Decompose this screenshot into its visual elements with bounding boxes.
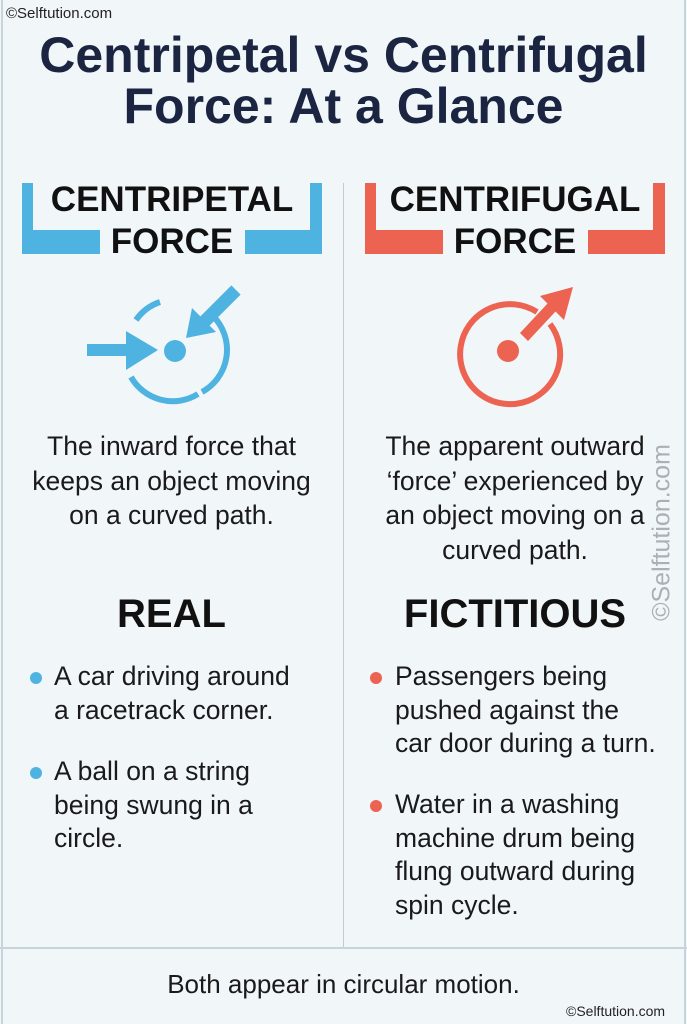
bullets: centrifugal examples: flung outward during xyxy=(395,856,635,886)
title xyxy=(39,27,648,134)
text: centrifugal description: curved path. xyxy=(442,534,588,564)
watermark vertical: ©Selftution.com xyxy=(648,444,676,621)
icon: inward arrows xyxy=(87,285,240,404)
text: centripetal description: on a curved path. xyxy=(69,500,274,530)
bullets: centrifugal examples: Passengers being xyxy=(395,661,607,691)
bullets: centrifugal examples: Water in a washing xyxy=(395,789,619,819)
text: centripetal description: The inward force that xyxy=(47,431,296,461)
divider vertical xyxy=(343,183,344,948)
bullets: centripetal examples: A car driving around xyxy=(54,661,290,691)
header: centrifugal xyxy=(365,180,665,261)
divider horizontal xyxy=(0,947,687,949)
watermark bottom: ©Selftution.com xyxy=(566,1003,665,1019)
text: centrifugal description: The apparent outward xyxy=(385,431,645,461)
bullets: centripetal examples: A ball on a string xyxy=(54,756,250,786)
bullets: centrifugal examples: pushed against the xyxy=(395,694,619,724)
header: centrifugal: FORCE xyxy=(454,222,576,261)
header: centrifugal: CENTRIFUGAL xyxy=(390,180,640,219)
header: centripetal xyxy=(22,180,322,261)
watermark top: ©Selftution.com xyxy=(6,5,112,22)
text: centrifugal description: ‘force’ experienced by xyxy=(387,466,643,496)
bullets: centripetal examples xyxy=(30,661,290,853)
header: centripetal: CENTRIPETAL xyxy=(51,180,293,219)
title: Centripetal vs Centrifugal xyxy=(39,27,648,83)
footer text: Both appear in circular motion. xyxy=(167,969,520,999)
text: centripetal description: keeps an object moving xyxy=(32,466,311,496)
icon: outward arrow xyxy=(457,287,573,408)
header: centripetal: FORCE xyxy=(111,222,233,261)
title: Force: At a Glance xyxy=(124,78,563,134)
label: fictitious: FICTITIOUS xyxy=(404,592,626,636)
bullets: centripetal examples: a racetrack corner. xyxy=(54,694,273,724)
bullets: centripetal examples: being swung in a xyxy=(54,790,253,820)
bullets: centrifugal examples: car door during a turn. xyxy=(395,728,656,758)
label: real: REAL xyxy=(117,592,226,636)
bullets: centripetal examples: circle. xyxy=(54,823,123,853)
text: centrifugal description: an object moving on a xyxy=(385,500,645,530)
bullets: centrifugal examples xyxy=(370,661,656,920)
text: centrifugal description xyxy=(385,431,645,564)
bullets: centrifugal examples: machine drum being xyxy=(395,822,635,852)
text: centripetal description xyxy=(32,431,311,530)
bullets: centrifugal examples: spin cycle. xyxy=(395,890,519,920)
